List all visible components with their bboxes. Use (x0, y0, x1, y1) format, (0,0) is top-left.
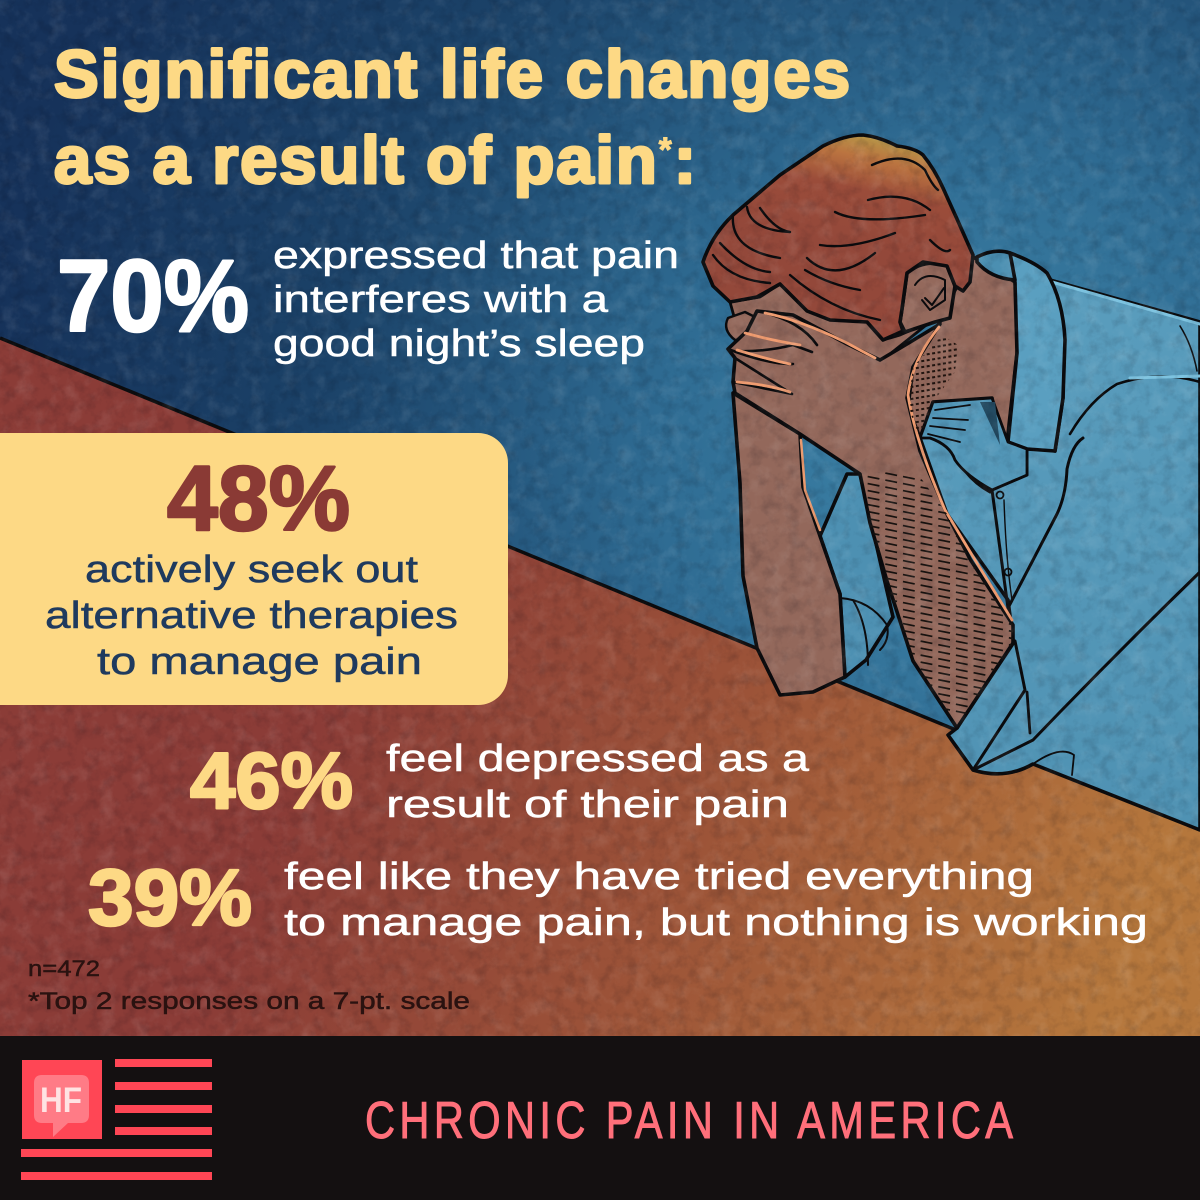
neck shadow lines (928, 405, 970, 442)
arm highlight (801, 440, 820, 530)
stat: 70% (57, 235, 679, 365)
number 70%: 70% (57, 239, 249, 353)
footer bar (0, 1036, 1200, 1200)
description: expressed that pain (273, 235, 679, 277)
stat: 46% (190, 736, 810, 826)
finger lines (728, 311, 817, 394)
description: to manage pain, but nothing is working (284, 902, 1148, 944)
hair (703, 135, 973, 340)
callout box (0, 433, 508, 705)
collar placket (920, 398, 1027, 490)
collar fold (977, 252, 1065, 451)
ear (900, 263, 955, 332)
callout: 48% (0, 433, 508, 705)
title: : (674, 123, 696, 198)
footer title: CHRONIC PAIN IN AMERICA (365, 1091, 1014, 1149)
callout description: actively seek out (85, 549, 419, 591)
shirt torso (920, 280, 1200, 830)
shirt light highlight (1052, 282, 1200, 378)
stat: 39% (88, 853, 1148, 944)
front arm and hand (728, 311, 1013, 728)
description (273, 235, 679, 365)
description: feel like they have tried everything (284, 856, 1034, 898)
callout description: alternative therapies (45, 595, 458, 637)
description: feel depressed as a (386, 738, 810, 780)
title: Significant life changes (54, 37, 850, 112)
beard stubble (910, 338, 957, 435)
description: good night’s sleep (273, 323, 645, 365)
fingers of back hand (726, 312, 757, 340)
number 48%: 48% (167, 448, 350, 550)
illustration: man with head in hand (703, 135, 1200, 830)
number 46%: 46% (190, 736, 353, 825)
title: as a result of pain (54, 123, 657, 198)
shirt details (840, 326, 1200, 775)
neck and jaw (908, 257, 1018, 451)
description: interferes with a (273, 279, 609, 321)
description (284, 856, 1148, 944)
background: red and orange table (0, 338, 1200, 1040)
title (54, 37, 850, 198)
back arm (733, 393, 845, 695)
flag stripes (21, 1059, 212, 1180)
table edge line (0, 338, 1200, 830)
footnote: n=472 (28, 956, 100, 981)
shirt sleeve behind arm (820, 474, 893, 677)
callout description (45, 549, 458, 683)
collar inner (977, 251, 1015, 280)
callout description: to manage pain (97, 641, 422, 683)
logo square (22, 1060, 102, 1139)
hair strands (713, 159, 950, 320)
speech bubble (34, 1075, 89, 1137)
footnote: *Top 2 responses on a 7-pt. scale (28, 988, 470, 1015)
HF letters: HF (40, 1081, 82, 1120)
forehead (730, 284, 930, 362)
footnote (28, 956, 470, 1015)
description: result of their pain (386, 784, 789, 826)
title: * (659, 131, 673, 169)
skin highlights (737, 313, 1012, 620)
logo: HF flag (21, 1059, 212, 1180)
number 39%: 39% (88, 853, 252, 942)
arm hair (860, 472, 1013, 714)
description (386, 738, 810, 826)
